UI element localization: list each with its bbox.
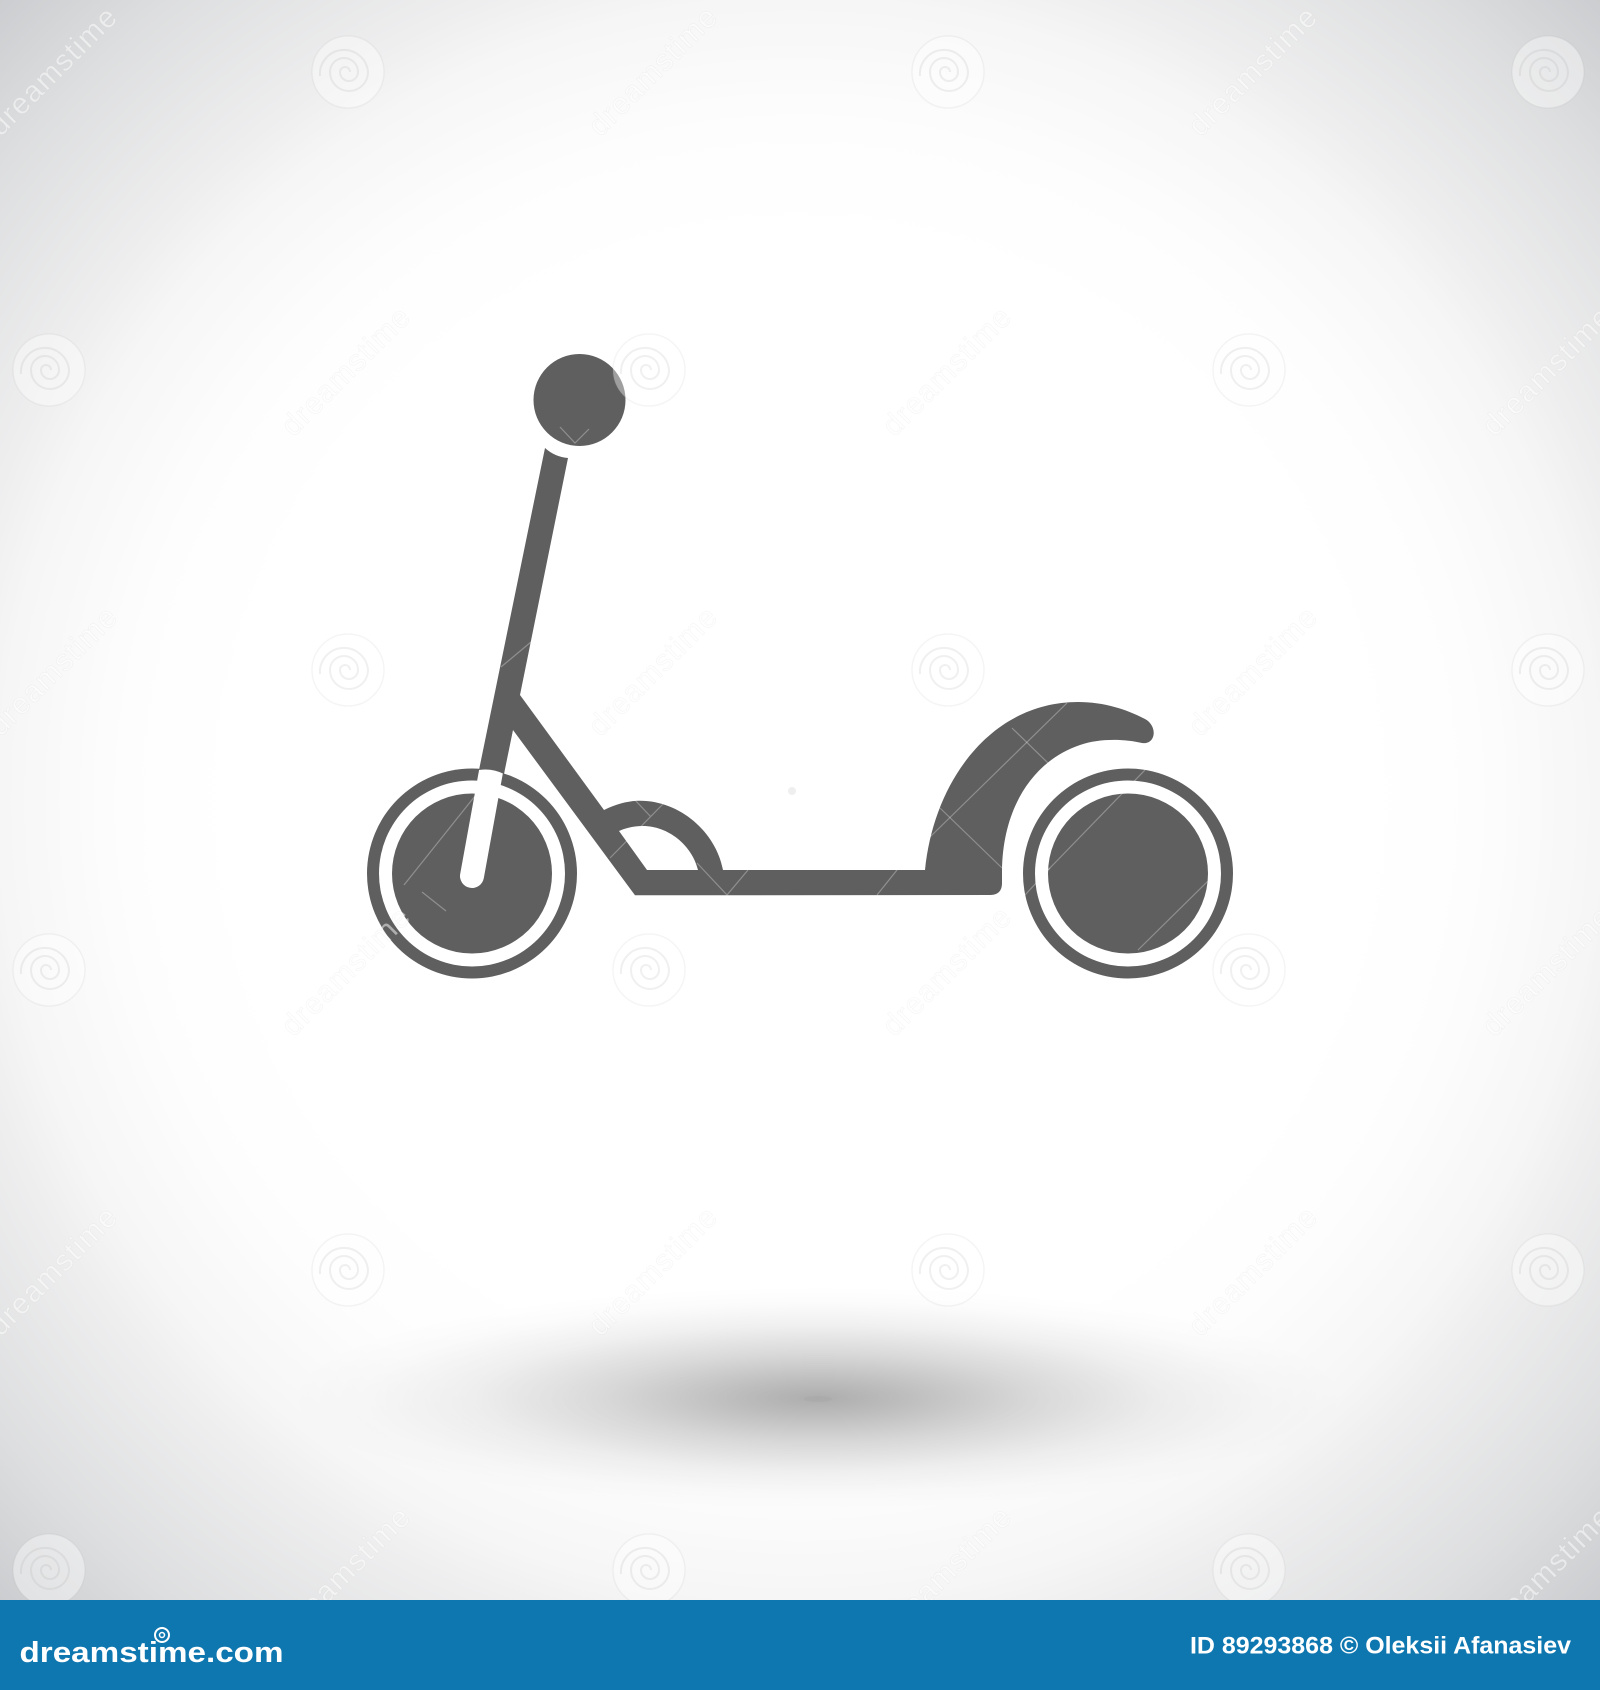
handle knob xyxy=(534,354,626,446)
icon: kick scooter xyxy=(367,354,1233,978)
rear wheel xyxy=(1023,768,1233,978)
watermark text: dreamstime xyxy=(582,0,725,143)
watermark text: dreamstime xyxy=(876,1500,1019,1643)
footer bar xyxy=(0,1600,1600,1690)
front wheel xyxy=(367,755,577,978)
watermark text: dreamstime xyxy=(275,1500,418,1643)
ground shadow xyxy=(288,1286,1348,1510)
frame: stem, strut, foot arch, deck and rear fender xyxy=(479,448,1154,895)
watermark text: dreamstime xyxy=(582,600,725,743)
watermark cross lines over the icon xyxy=(404,427,1208,950)
watermark text: dreamstime xyxy=(275,300,418,443)
watermark text: dreamstime xyxy=(876,300,1019,443)
watermark text: dreamstime xyxy=(275,900,418,1043)
watermark text: dreamstime xyxy=(876,900,1019,1043)
footer credit: ID 89293868 © Oleksii Afanasiev xyxy=(1190,1632,1571,1660)
footer logo: dreamstime.com xyxy=(20,1628,284,1669)
watermark text: dreamstime xyxy=(582,1200,725,1343)
faint watermark dot xyxy=(788,787,796,795)
watermark text: dreamstime xyxy=(1182,1200,1325,1343)
watermark text: dreamstime xyxy=(1182,0,1325,143)
footer logo: dreamstime.com: dreamstime.com xyxy=(20,1637,284,1669)
watermark text: dreamstime xyxy=(1182,600,1325,743)
